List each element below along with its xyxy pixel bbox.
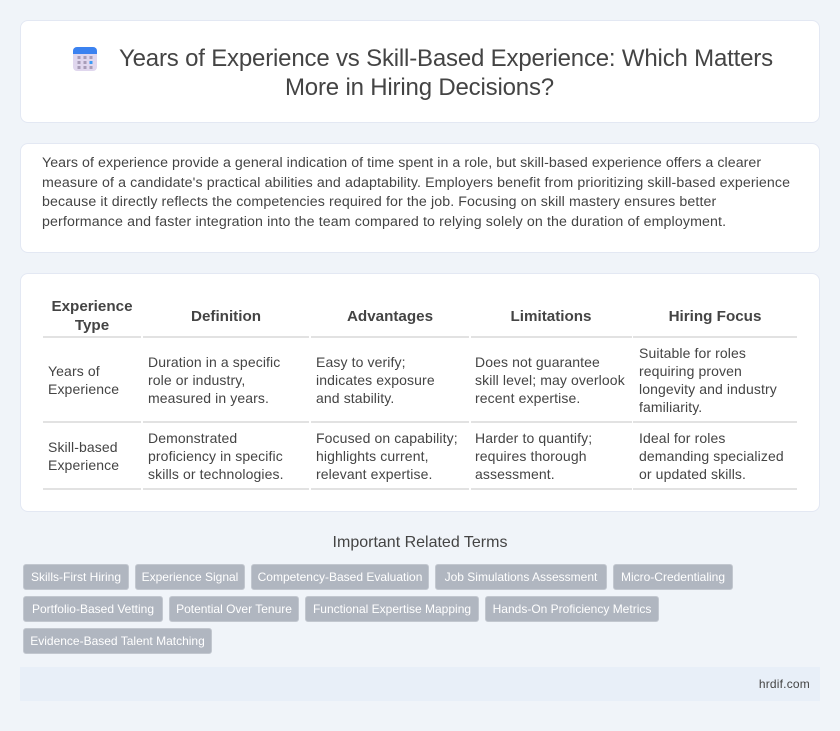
row: years of experience: role or industry, [148,372,245,388]
row: years of experience: Easy to verify; [316,354,406,370]
footer source: hrdif.com [759,677,810,691]
related terms heading: Important Related Terms [333,534,507,551]
related terms tags: Functional Expertise Mapping [313,602,471,616]
table header row: Definition [191,308,261,325]
table header row [43,298,797,338]
row: years of experience: Experience [48,381,119,397]
row: skill-based experience: relevant expertise. [316,466,432,482]
title: Years of Experience vs Skill-Based Experience: Which Matters [119,45,773,72]
row: years of experience: requiring proven [639,363,742,379]
related terms tags: Potential Over Tenure [176,602,292,616]
intro paragraph [42,155,790,230]
row: years of experience: Suitable for roles [639,345,746,361]
row: skill-based experience: demanding specialized [639,448,784,464]
icon: calendar [73,47,97,71]
row: years of experience: indicates exposure [316,372,435,388]
title [119,45,773,101]
row: skill-based experience: Ideal for roles [639,430,725,446]
row: skill-based experience: skills or technologies. [148,466,284,482]
row: years of experience: Years of [48,363,100,379]
row: years of experience: Does not guarantee [475,354,600,370]
intro paragraph: because it directly reflects the competencies required for the job. Focusing on skill mastery ensures better [42,194,716,210]
row: skill-based experience: proficiency in specific [148,448,283,464]
row: years of experience: measured in years. [148,390,269,406]
table header row: Experience [51,298,133,315]
row: skill-based experience: highlights current, [316,448,429,464]
intro paragraph: performance and faster integration into the team compared to relying solely on the duration of employment. [42,214,726,230]
row: skill-based experience: or updated skills. [639,466,746,482]
title: More in Hiring Decisions? [285,74,554,101]
related terms tags [23,564,733,654]
row: years of experience: skill level; may overlook [475,372,625,388]
row: skill-based experience: requires thorough [475,448,587,464]
row: years of experience: longevity and industry [639,381,777,397]
table header row: Limitations [510,308,592,325]
header card [20,20,820,123]
row: skill-based experience: assessment. [475,466,555,482]
row: skill-based experience [43,430,797,490]
table header row: Type [75,317,109,334]
intro text card [20,143,820,253]
related terms tags: Portfolio-Based Vetting [32,602,154,616]
row: years of experience: and stability. [316,390,394,406]
row: years of experience: familiarity. [639,399,702,415]
table header row: Hiring Focus [669,308,761,325]
related terms tags: Job Simulations Assessment [445,570,597,584]
row: skill-based experience: Skill-based [48,439,118,455]
row: years of experience [43,345,797,423]
row: skill-based experience: Harder to quantify; [475,430,592,446]
table header row: Advantages [347,308,433,325]
comparison table card [20,273,820,512]
related terms tags: Evidence-Based Talent Matching [30,634,205,648]
related terms tags: Micro-Credentialing [621,570,725,584]
row: years of experience: Duration in a specific [148,354,280,370]
intro paragraph: Years of experience provide a general indication of time spent in a role, but skill-based experience offers a clearer [42,155,761,171]
intro paragraph: measure of a candidate's practical abilities and adaptability. Employers benefit from prioritizing skill-based experience [42,174,790,190]
row: years of experience: recent expertise. [475,390,580,406]
related terms tags: Hands-On Proficiency Metrics [493,602,651,616]
footer bar [20,667,820,701]
row: skill-based experience: Demonstrated [148,430,237,446]
related terms tags: Competency-Based Evaluation [258,570,422,584]
related terms tags: Experience Signal [142,570,238,584]
row: skill-based experience: Experience [48,457,119,473]
related terms tags: Skills-First Hiring [31,570,121,584]
row: skill-based experience: Focused on capability; [316,430,458,446]
